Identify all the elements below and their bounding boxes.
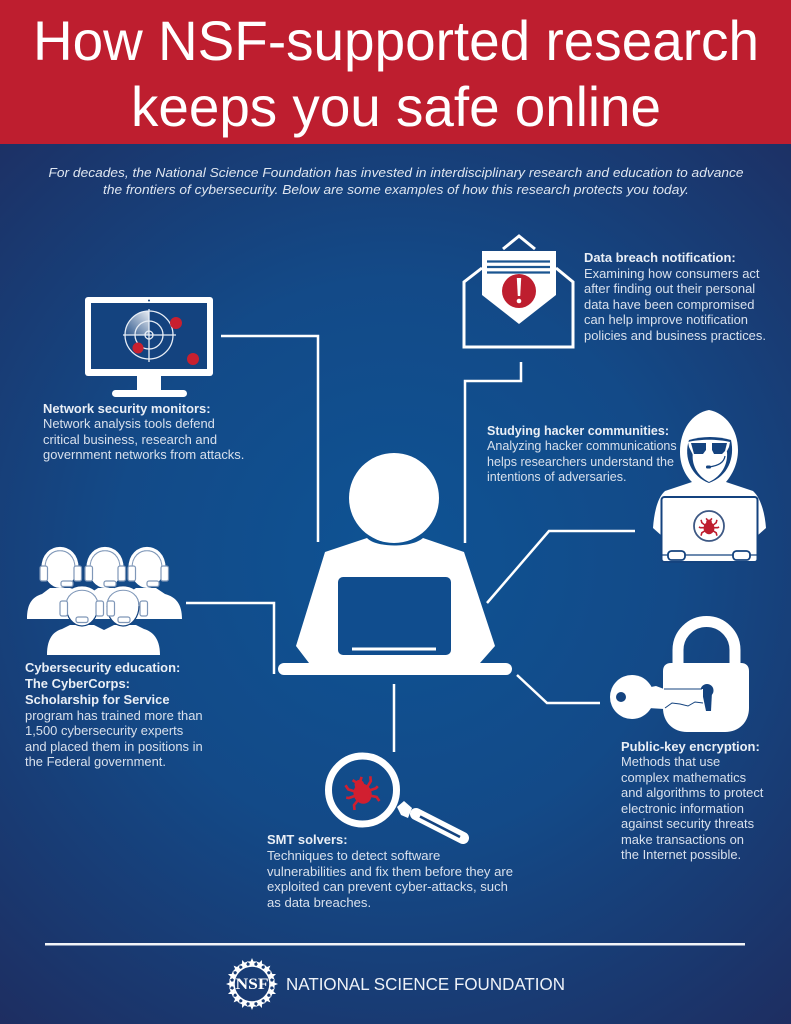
intro text: the frontiers of cybersecurity. Below are some examples of how this research protects you today. xyxy=(103,182,689,197)
text: data breach notification: data have been compromised xyxy=(584,297,754,312)
text: studying hacker communities xyxy=(487,424,677,484)
text: cybersecurity education: 1,500 cybersecurity experts xyxy=(25,723,183,738)
text: network security monitors: Network security monitors: xyxy=(43,401,211,416)
text: SMT solvers: as data breaches. xyxy=(267,895,371,910)
text: cybersecurity education: Cybersecurity education: xyxy=(25,660,180,675)
text: cybersecurity education: Scholarship for Service xyxy=(25,692,170,707)
text: network security monitors: Network analysis tools defend xyxy=(43,416,215,431)
icon: padlock and key xyxy=(610,622,749,732)
icon: magnifying glass with bug xyxy=(328,756,463,838)
text: SMT solvers xyxy=(267,832,513,910)
text: studying hacker communities: Studying hacker communities: xyxy=(487,424,669,438)
footer rule xyxy=(45,943,745,946)
text: network security monitors xyxy=(43,401,244,462)
text: public-key encryption: complex mathematics xyxy=(621,770,746,785)
text: data breach notification: can help improve notification xyxy=(584,312,748,327)
text: SMT solvers: exploited can prevent cyber-attacks, such xyxy=(267,879,508,894)
icon: team with headsets xyxy=(27,548,182,655)
text: cybersecurity education: The CyberCorps: xyxy=(25,676,130,691)
text: public-key encryption xyxy=(621,739,764,862)
text: data breach notification xyxy=(584,250,766,343)
text: SMT solvers: vulnerabilities and fix them before they are xyxy=(267,864,513,879)
text: public-key encryption: electronic information xyxy=(621,801,744,816)
connector lines xyxy=(186,336,635,752)
text: public-key encryption: against security threats xyxy=(621,816,754,831)
central figure at laptop xyxy=(278,453,512,675)
text: public-key encryption: make transactions on xyxy=(621,832,744,847)
text: network security monitors: government networks from attacks. xyxy=(43,447,244,462)
NSF logo xyxy=(226,958,278,1010)
text: studying hacker communities: Analyzing hacker communications xyxy=(487,439,677,453)
text: cybersecurity education: and placed them in positions in xyxy=(25,739,203,754)
text: SMT solvers: SMT solvers: xyxy=(267,832,348,847)
icon: hooded hacker xyxy=(653,410,766,562)
text: cybersecurity education: the Federal government. xyxy=(25,754,166,769)
icon: envelope with alert xyxy=(464,236,573,347)
icon: network monitor xyxy=(85,297,213,397)
intro text xyxy=(48,165,744,197)
intro text: For decades, the National Science Foundation has invested in interdisciplinary research and education to advance xyxy=(48,165,744,180)
title banner xyxy=(0,0,791,144)
text: network security monitors: critical business, research and xyxy=(43,432,217,447)
text: studying hacker communities: intentions of adversaries. xyxy=(487,470,626,484)
text: data breach notification: policies and business practices. xyxy=(584,328,766,343)
title banner: How NSF-supported research xyxy=(33,9,759,72)
text: public-key encryption: Public-key encryption: xyxy=(621,739,760,754)
text: data breach notification: after finding out their personal xyxy=(584,281,755,296)
text: cybersecurity education: program has trained more than xyxy=(25,708,203,723)
title banner: keeps you safe online xyxy=(131,75,661,138)
text: SMT solvers: Techniques to detect software xyxy=(267,848,440,863)
text: studying hacker communities: helps researchers understand the xyxy=(487,455,674,469)
text: public-key encryption: the Internet possible. xyxy=(621,847,741,862)
text: public-key encryption: Methods that use xyxy=(621,754,720,769)
text: public-key encryption: and algorithms to protect xyxy=(621,785,764,800)
text: data breach notification: Examining how consumers act xyxy=(584,266,760,281)
NSF wordmark: NATIONAL SCIENCE FOUNDATION xyxy=(286,974,565,994)
text: cybersecurity education xyxy=(25,660,203,769)
text: data breach notification: Data breach notification: xyxy=(584,250,736,265)
NSF logo: NSF xyxy=(236,976,269,993)
